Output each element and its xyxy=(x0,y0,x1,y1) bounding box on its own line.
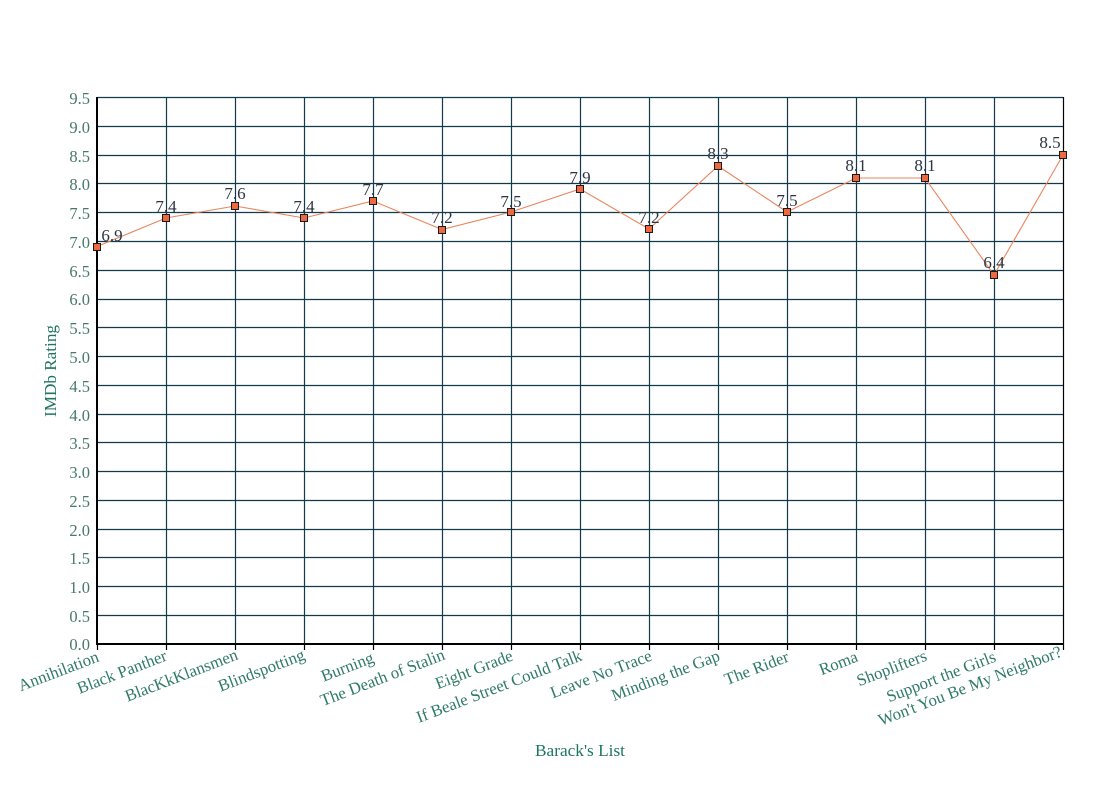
y axis tick labels: 7.5 xyxy=(69,204,90,223)
x axis film labels: BlacKkKlansmen xyxy=(122,645,241,705)
y axis tick labels: 1.5 xyxy=(69,549,90,568)
y axis tick labels: 4.0 xyxy=(69,406,90,425)
x axis film labels: Shoplifters xyxy=(854,646,929,690)
data value labels: 7.2 xyxy=(638,208,660,227)
x axis film labels: Leave No Trace xyxy=(548,646,654,702)
data value labels: 7.2 xyxy=(431,208,453,227)
y axis tick labels: 3.5 xyxy=(69,434,90,453)
x axis film labels: Annihilation xyxy=(15,647,102,695)
data value labels: 7.5 xyxy=(500,192,522,211)
x axis film labels xyxy=(15,642,1064,730)
data value labels: 8.3 xyxy=(707,144,729,163)
axes xyxy=(96,97,1064,650)
y axis tick labels: 6.0 xyxy=(69,290,90,309)
y axis tick labels: 8.5 xyxy=(69,147,90,166)
x axis film labels: Minding the Gap xyxy=(609,646,722,705)
data value labels: 8.1 xyxy=(914,156,936,175)
y axis tick labels: 6.5 xyxy=(69,262,90,281)
y axis tick labels: 4.5 xyxy=(69,377,90,396)
y axis tick labels: 1.0 xyxy=(69,578,90,597)
data value labels: 8.5 xyxy=(1039,133,1061,152)
y axis tick labels xyxy=(69,89,90,654)
x axis film labels: Won't You Be My Neighbor? xyxy=(875,642,1064,730)
data value labels xyxy=(101,133,1061,272)
data value labels: 7.5 xyxy=(776,191,798,210)
y axis tick labels: 9.0 xyxy=(69,118,90,137)
y axis tick labels: 9.5 xyxy=(69,89,90,108)
data value labels: 7.7 xyxy=(362,180,384,199)
y axis tick labels: 8.0 xyxy=(69,175,90,194)
x axis film labels: If Beale Street Could Talk xyxy=(414,646,585,727)
y axis tick labels: 0.5 xyxy=(69,607,90,626)
y axis tick labels: 5.5 xyxy=(69,319,90,338)
data value labels: 7.4 xyxy=(155,197,177,216)
x axis film labels: Black Panther xyxy=(74,646,170,698)
horizontal grid lines xyxy=(97,97,1063,644)
x axis film labels: Support the Girls xyxy=(884,647,998,706)
data point markers xyxy=(94,152,1066,278)
x axis film labels: The Rider xyxy=(722,647,792,689)
x axis film labels: Blindspotting xyxy=(215,645,308,695)
x axis film labels: The Death of Stalin xyxy=(317,645,448,710)
data value labels: 6.4 xyxy=(983,253,1005,272)
data value labels: 7.6 xyxy=(224,184,246,203)
data line xyxy=(97,155,1063,275)
y axis tick labels: 0.0 xyxy=(69,635,90,654)
y axis tick labels: 5.0 xyxy=(69,348,90,367)
data value labels: 6.9 xyxy=(101,226,123,245)
y axis title: IMDb Rating xyxy=(41,325,60,417)
data value labels: 7.9 xyxy=(569,168,591,187)
x axis title: Barack's List xyxy=(535,741,625,760)
data value labels: 8.1 xyxy=(845,156,867,175)
y axis tick labels: 3.0 xyxy=(69,463,90,482)
y axis tick labels: 2.5 xyxy=(69,492,90,511)
x axis film labels: Eight Grade xyxy=(432,646,515,693)
y axis tick labels: 2.0 xyxy=(69,521,90,540)
y axis tick labels: 7.0 xyxy=(69,233,90,252)
data value labels: 7.4 xyxy=(293,197,315,216)
x axis film labels: Roma xyxy=(816,647,861,679)
x axis film labels: Burning xyxy=(318,648,377,685)
